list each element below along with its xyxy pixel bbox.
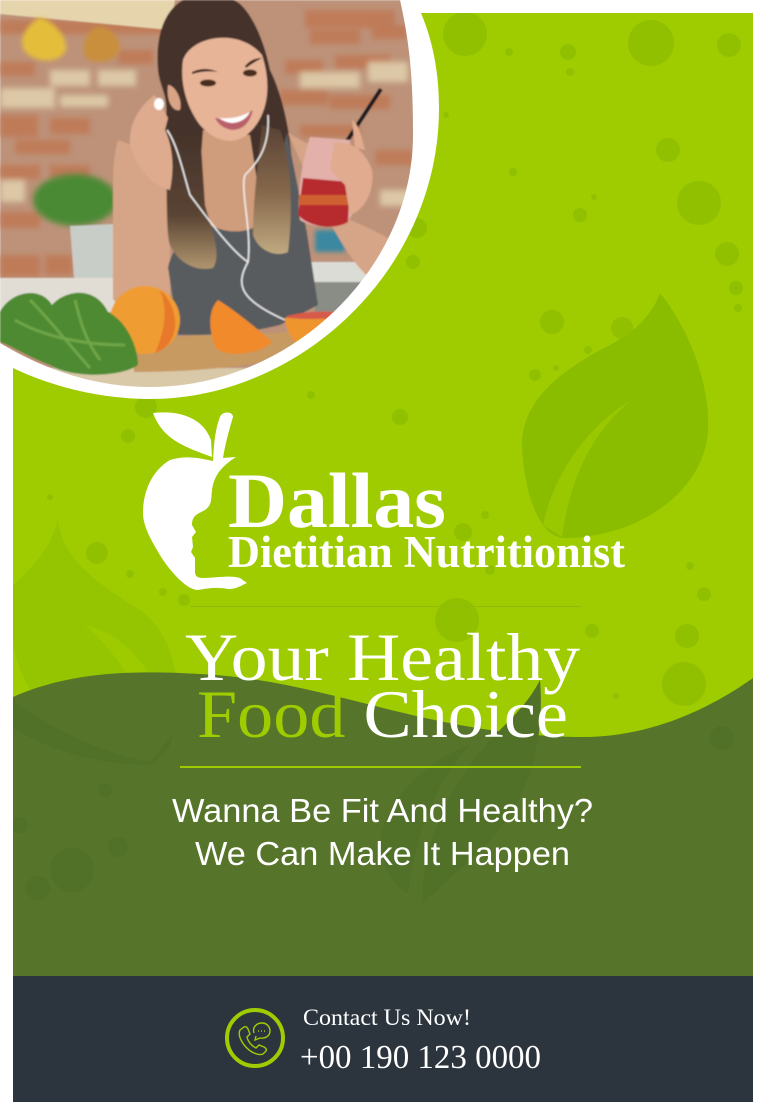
headline: Your Healthy: Your Healthy [185, 619, 580, 695]
photo: neck and chest [200, 129, 258, 232]
leaf: top right [522, 293, 708, 538]
icon: phone with chat bubble [227, 1010, 283, 1066]
photo: smoothie jar and hand [298, 89, 381, 227]
photo: face [168, 38, 267, 141]
photo: back of hair [156, 0, 292, 176]
photo: lettuce [0, 293, 138, 375]
photo: hair strands [165, 125, 291, 269]
photo: earphone cable [167, 115, 285, 320]
logo text: Dietitian Nutritionist: Dietitian Nutritionist [228, 527, 625, 577]
photo: grey tank top [168, 133, 318, 335]
icon: apple leaf [153, 412, 212, 457]
divider line upper [190, 606, 581, 607]
footer bar [13, 976, 753, 1102]
photo: grapefruit [110, 286, 340, 354]
photo: arms and shoulders [113, 133, 396, 300]
photo: counter at right [310, 226, 366, 312]
photo: shelf and mugs [0, 0, 175, 62]
white circular frame [0, 0, 439, 399]
divider line lower [180, 766, 581, 768]
logo text: Dallas: Dallas [228, 457, 446, 544]
logo: apple with face silhouette [143, 412, 247, 590]
photo: cutting board [50, 332, 294, 387]
contact label: Contact Us Now! [303, 1005, 471, 1030]
dark green wave [13, 672, 753, 976]
icon: apple body and stem [143, 412, 247, 590]
photo: woman with smoothie in kitchen [0, 0, 420, 400]
tagline line 1: Wanna Be Fit And Healthy? [172, 792, 593, 829]
photo: brick wall [0, 0, 420, 400]
leaf: left [13, 522, 175, 690]
leaves on the dark wave [498, 680, 541, 736]
headline: Food Choice: Food Choice [197, 676, 568, 752]
photo: potted plant [0, 174, 117, 312]
decorative bubbles on green [47, 12, 743, 706]
tagline line 2: We Can Make It Happen [195, 835, 570, 872]
photo: hand raised to ear [130, 95, 172, 190]
phone number: +00 190 123 0000 [300, 1039, 541, 1076]
